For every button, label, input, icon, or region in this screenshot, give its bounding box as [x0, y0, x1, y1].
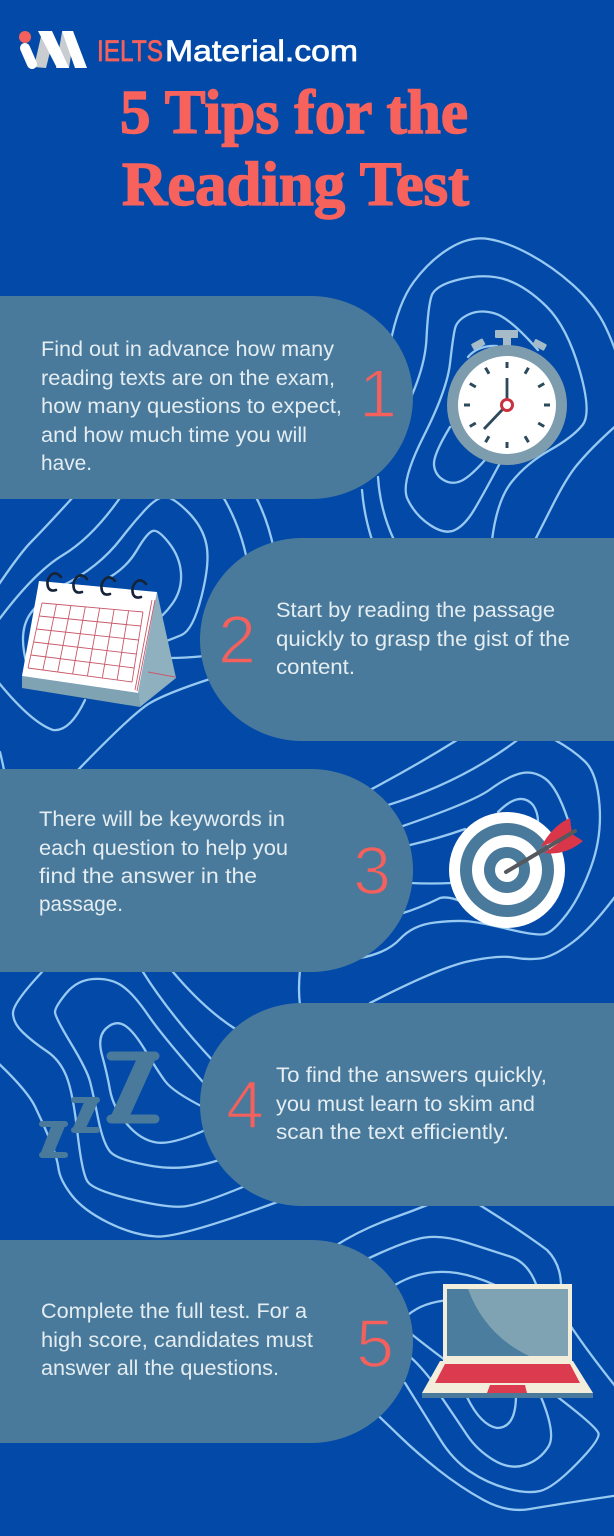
icon: desk calendar [22, 573, 176, 707]
tip 5 text: answer all the questions. [41, 1357, 279, 1380]
tip 4 text [276, 1064, 547, 1144]
tip 2 text [276, 599, 570, 679]
tip 5 text: Complete the full test. For a [41, 1300, 307, 1323]
icon: laptop [422, 1284, 593, 1398]
tip 2 text: quickly to grasp the gist of the [276, 628, 570, 651]
tip 4 text: To find the answers quickly, [276, 1064, 547, 1087]
panel: tip 4 [200, 1003, 614, 1206]
panel: tip 1 [0, 296, 413, 499]
tip 4 text: you must learn to skim and [276, 1093, 535, 1116]
tip 5 text: high score, candidates must [41, 1329, 313, 1352]
number 3: 3 [353, 833, 391, 909]
number 4: 4 [226, 1067, 264, 1143]
icon: target with arrow [449, 812, 583, 928]
tip 5 text [41, 1300, 313, 1380]
logo wordmark: IELTS [97, 35, 163, 68]
icon: sleeping zzz [40, 1056, 157, 1155]
tip 1 text: how many questions to expect, [41, 395, 342, 418]
number 5: 5 [356, 1306, 394, 1382]
icon: logo mark [19, 31, 87, 68]
panel: tip 2 [200, 538, 614, 741]
tip 3 text: each question to help you [39, 837, 288, 860]
tip 2 text: content. [276, 656, 355, 679]
title: Reading Test [122, 151, 469, 219]
tip 3 text: There will be keywords in [39, 808, 285, 831]
tip 1 text: and how much time you will [41, 424, 307, 447]
tip 3 text: passage. [39, 893, 123, 916]
tip 1 text: reading texts are on the exam, [41, 367, 335, 390]
panel: tip 5 [0, 1240, 413, 1443]
tip 3 text [39, 808, 288, 916]
tip 1 text: Find out in advance how many [41, 338, 335, 361]
icon: stopwatch [447, 330, 567, 465]
tip 1 text [41, 338, 342, 475]
tip 3 text: find the answer in the [39, 865, 257, 888]
logo: IELTSMaterial.com: Material.com [165, 35, 358, 68]
logo: IELTSMaterial.com [19, 31, 358, 68]
number 2: 2 [218, 602, 256, 678]
panel: tip 3 [0, 769, 413, 972]
tip 2 text: Start by reading the passage [276, 599, 555, 622]
number 1: 1 [359, 356, 397, 432]
tip 1 text: have. [41, 452, 92, 475]
title [120, 79, 469, 219]
tip 4 text: scan the text efficiently. [276, 1121, 509, 1144]
title: 5 Tips for the [120, 79, 468, 147]
